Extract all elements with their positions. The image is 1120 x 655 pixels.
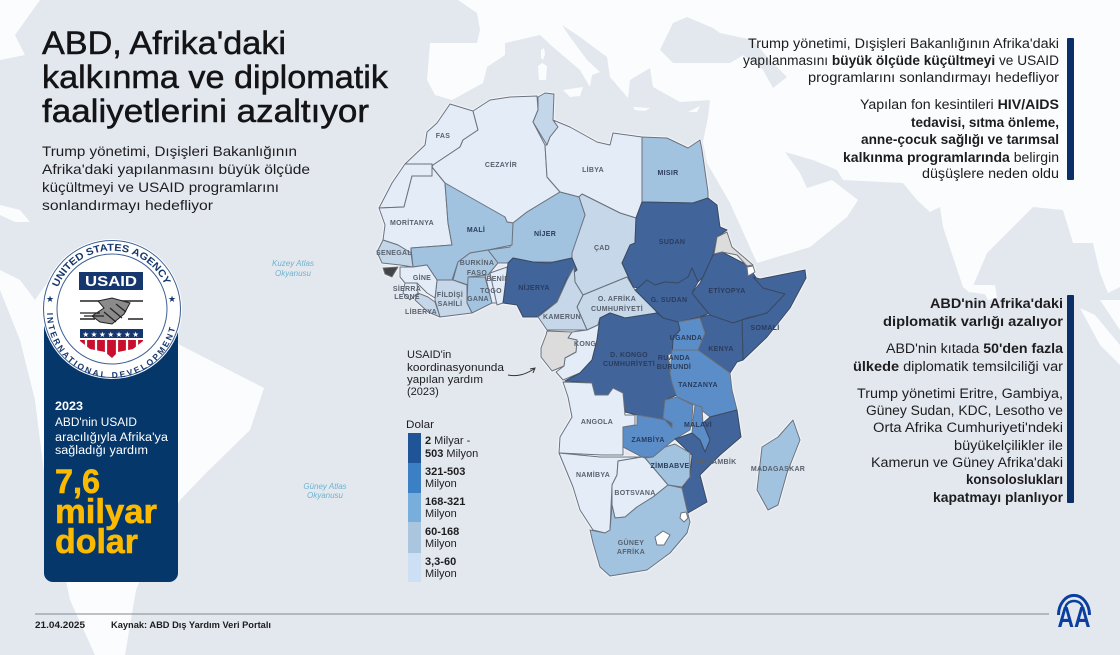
country labels: ZAMBİYA [631,436,665,444]
footer date: 21.04.2025 [35,620,85,630]
text block: diplomatic presence [853,296,1064,505]
Sudan [622,198,727,288]
country labels: ÇAD [594,245,610,252]
legend: Milyon [425,538,457,550]
Botswana [612,457,668,518]
text block: diplomatic presence: konsoloslukları [966,472,1063,487]
country labels: LİBYA [582,166,604,174]
legend: 60-168 [425,526,459,538]
Togo [485,275,497,303]
card text: sağladığı yardım [55,445,148,457]
country labels: BURUNDİ [657,363,691,371]
country labels: SUDAN [659,239,685,246]
Gabon [541,331,577,371]
big number [55,463,157,561]
ocean label: south atlantic: Güney Atlas [303,482,347,491]
Guinea [400,265,437,298]
text block: diplomatic presence: ülkede diplomatik temsilciliği var [853,359,1064,374]
country labels: SAHİLİ [438,300,462,308]
text block: diplomatic presence: Trump yönetimi Eritre, Gambiya, [857,386,1063,401]
title: faaliyetlerini azaltıyor [42,93,369,129]
country labels: KENYA [708,346,734,353]
intro text [42,143,310,213]
intro text: küçültmeyi ve USAID programlarını [42,179,279,195]
legend: 2 Milyar - [425,435,471,447]
intro text: sonlandırmayı hedefliyor [42,197,213,213]
USAID seal: UNITED STATES AGENCY [52,244,171,286]
country labels: GİNE [413,274,431,282]
country labels: LİBERYA [405,308,437,316]
Tunisia [533,93,558,145]
legend: 321-503 [425,466,465,478]
text block: funding cuts: programlarını sonlandırmayı hedefliyor [808,70,1060,85]
Angola [559,382,635,455]
country labels: ETİYOPYA [708,287,746,295]
USAID seal: ★★★★★★★ [82,330,141,339]
DR Congo [565,313,680,428]
legend: 503 Milyon [425,448,478,460]
Mozambique [675,410,741,513]
text block: diplomatic presence: ABD'nin kıtada 50'den fazla [886,341,1064,356]
Somalia [742,270,806,360]
text block: funding cuts: kalkınma programlarında belirgin [843,150,1059,165]
Uganda [672,318,705,350]
arrow to Gabon [508,368,535,376]
Benin [490,267,508,305]
country labels: SOMALİ [750,324,780,332]
Ghana [467,277,492,313]
intro text: Trump yönetimi, Dışişleri Bakanlığının [42,143,297,159]
country labels: FAS [436,133,450,140]
card text: aracılığıyla Afrika'ya [55,432,169,444]
card text: 2023 [55,401,83,413]
Congo [556,318,600,380]
Morocco [405,104,478,165]
country labels: D. KONGO [610,352,648,359]
legend: 3,3-60 [425,556,456,568]
Libya [545,120,642,218]
Mauritania [379,167,452,253]
country labels: KONGO [574,341,602,348]
Guinea-Bissau and Gambia [383,267,398,277]
country labels: TOGO [480,288,502,295]
title: ABD, Afrika'daki [42,25,286,61]
USAID seal: USAID [85,273,137,290]
country labels: CEZAYİR [485,161,517,169]
panel: USAID card [43,239,182,582]
Ethiopia [692,252,785,323]
footer rule [35,614,1049,615]
country labels: UGANDA [670,335,702,342]
country labels: MALAVİ [684,421,712,429]
USAID seal: ★ [46,294,54,304]
USAID seal: ★ [168,294,176,304]
country labels: LEONE [394,294,420,301]
country labels: CUMHURİYETİ [603,360,655,368]
icon: AA logo: AA [1058,602,1091,634]
Burkina Faso [453,250,498,285]
country labels: MISIR [658,170,678,177]
Madagascar [757,420,800,510]
Zambia [623,397,693,457]
Ivory Coast [435,280,472,317]
Mali [411,183,513,280]
text block: diplomatic presence: kapatmayı planlıyor [933,490,1064,505]
legend: 168-321 [425,496,465,508]
South Africa [590,485,690,576]
country labels: NİJERYA [518,284,550,292]
Tanzania [670,350,737,417]
ocean label: north atlantic: Kuzey Atlas [272,259,314,268]
text block: diplomatic presence: diplomatik varlığı azalıyor [883,314,1064,329]
text block: funding cuts [743,36,1060,181]
country labels: MALİ [467,226,485,234]
country labels: BURKİNA [460,259,494,267]
country labels: FİLDİŞİ [437,291,463,299]
ocean label: south atlantic: Okyanusu [307,491,344,500]
Senegal [377,240,413,267]
Sierra Leone [403,283,418,300]
Niger [488,192,585,263]
title: kalkınma ve diplomatik [42,59,389,95]
country labels: GÜNEY [618,538,644,547]
country labels: G. SUDAN [651,297,687,304]
country labels: ANGOLA [581,419,613,426]
text block: funding cuts: düşüşlere neden oldu [922,166,1059,181]
country labels: BENİN [486,275,510,283]
Namibia [559,453,642,533]
annotation: USAID coordination: koordinasyonunda [407,362,505,374]
text block: funding cuts: anne-çocuk sağlığı ve tarımsal [861,132,1059,147]
big number: milyar [55,493,157,531]
Rwanda and Burundi [668,352,678,372]
title [42,25,389,129]
accent bar: funding cuts [1067,38,1074,180]
country labels: TANZANYA [678,382,718,389]
icon: AA logo [1058,595,1091,634]
country labels: NAMİBYA [576,471,610,479]
country labels: FASO [467,270,487,277]
text block: diplomatic presence: Güney Sudan, KDC, Lesotho ve [866,403,1063,418]
text block: funding cuts: Yapılan fon kesintileri HIV/AIDS [860,97,1059,112]
country labels: SENEGAL [376,250,412,257]
legend [406,419,478,582]
annotation: USAID coordination: (2023) [407,386,439,398]
Zimbabwe [645,444,690,487]
card background [44,312,178,582]
ocean label: north atlantic: Okyanusu [275,269,312,278]
Eswatini [680,512,688,522]
Cameroon [538,267,587,330]
country labels: KAMERUN [543,314,581,321]
Lesotho [655,531,670,545]
text block: diplomatic presence: Kamerun ve Güney Afrika'daki [871,455,1063,470]
Chad [572,194,636,295]
Western Sahara [379,164,432,208]
ocean label: south atlantic [303,482,347,500]
annotation: USAID coordination: yapılan yardım [407,374,483,386]
Eritrea [714,232,753,266]
country labels: NİJER [534,230,556,238]
country labels: O. AFRİKA [598,295,636,303]
big number: dolar [55,523,138,561]
big number: 7,6 [55,463,100,501]
Malawi [692,405,710,452]
country labels: MOZAMBİK [696,458,736,466]
Algeria [432,96,560,223]
map of Africa [377,93,806,576]
card text [55,401,169,457]
Egypt [642,137,708,203]
country labels: MORİTANYA [390,219,434,227]
country labels: BOTSVANA [614,490,656,497]
ocean label: north atlantic [272,259,314,278]
South Sudan [635,268,710,322]
country labels: GANA [467,296,489,303]
annotation: USAID coordination: USAID'in [407,349,451,361]
Nigeria [503,258,577,317]
text block: diplomatic presence: ABD'nin Afrika'daki [930,296,1063,311]
Djibouti [747,266,755,276]
accent bar: diplomatic presence [1067,295,1074,503]
text block: funding cuts: tedavisi, sıtma önleme, [911,115,1059,130]
text block: funding cuts: Trump yönetimi, Dışişleri Bakanlığının Afrika'daki [748,36,1059,51]
footer source: Kaynak: ABD Dış Yardım Veri Portalı [111,620,271,630]
legend: Dolar [406,419,434,431]
annotation: USAID coordination [407,349,505,398]
Liberia [415,293,440,317]
text block: funding cuts: yapılanmasını büyük ölçüde küçültmeyi ve USAID [743,53,1059,68]
legend: Milyon [425,508,457,520]
country labels: ZİMBABVE [651,462,690,470]
legend: Milyon [425,478,457,490]
Central African Republic [577,277,657,330]
country labels: AFRİKA [617,548,645,556]
card text: ABD'nin USAID [55,417,137,429]
legend: Milyon [425,568,457,580]
intro text: Afrika'daki yapılanmasını büyük ölçüde [42,161,310,177]
text block: diplomatic presence: Orta Afrika Cumhuriyeti'ndeki [873,420,1063,435]
country labels: CUMHURİYETİ [591,305,643,313]
text block: diplomatic presence: büyükelçilikler ile [954,438,1063,453]
country labels: RUANDA [658,355,690,362]
Kenya [698,315,743,373]
USAID seal [43,239,182,379]
country labels [376,133,805,556]
country labels: MADAGASKAR [751,466,805,473]
country labels: SİERRA [393,285,421,293]
USAID seal: INTERNATIONAL DEVELOPMENT [47,313,175,378]
